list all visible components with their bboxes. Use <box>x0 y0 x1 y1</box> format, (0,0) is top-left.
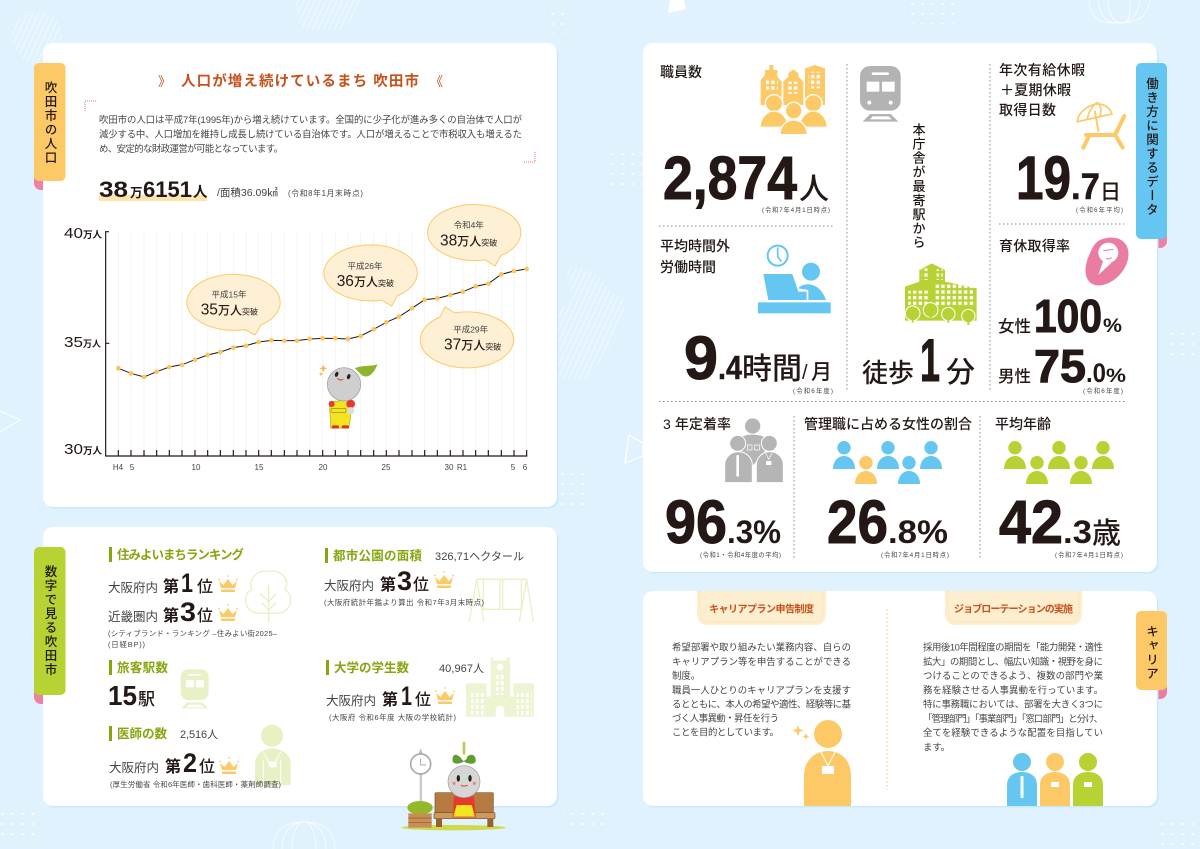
stat: 管理職に占める女性の割合: .8% <box>888 514 948 550</box>
panel: numbers <box>34 527 558 808</box>
block: ジョブローテーションの実施: 採用後10年間程度の期間を「能力開発・適性 <box>923 642 1103 652</box>
block: 大学の学生数: 第 <box>382 690 398 709</box>
mascot: standing <box>319 364 377 428</box>
icon: people blue and orange <box>833 441 942 484</box>
y axis labels: 40 <box>64 226 83 242</box>
tab: 働き方に関するデータ <box>1136 63 1167 239</box>
callout: 平成15年: 平成15年 <box>212 290 247 300</box>
tab: 働き方に関するデータ: 働き方に関するデータ <box>1144 77 1158 217</box>
icon: people green <box>1004 441 1114 484</box>
block: 都市公園の面積: 326,71ヘクタール <box>435 550 524 563</box>
x axis labels: 15 <box>255 463 264 472</box>
x axis labels: 10 <box>192 463 201 472</box>
icon: crown <box>218 575 238 592</box>
stat: 育休取得率: % <box>1106 366 1126 387</box>
block: 都市公園の面積: 都市公園の面積 <box>333 548 422 563</box>
y axis labels: 万人 <box>83 446 103 457</box>
callout: 平成26年 <box>324 245 417 306</box>
stat: 育休取得率: % <box>1103 316 1122 337</box>
stat: 育休取得率: 育休取得率 <box>999 238 1070 254</box>
stat: 3年定着率 <box>663 416 783 559</box>
icon: tree <box>245 571 291 623</box>
tab: キャリア: キャリア <box>1144 625 1158 681</box>
tab: 数字で見る吹田市 <box>34 547 66 695</box>
stat: 管理職に占める女性の割合 <box>804 416 972 559</box>
stat: 年次有給休暇: .7 <box>1071 166 1100 207</box>
x axis labels: 20 <box>319 463 328 472</box>
plot <box>106 232 529 456</box>
stat: 平均時間外労働時間: 労働時間 <box>660 259 716 275</box>
block: 都市公園の面積: 3 <box>397 566 412 596</box>
stat: 平均時間外労働時間: / <box>802 362 808 384</box>
stat: 育休取得率: 男性 <box>998 367 1031 386</box>
block: 住みよいまちランキング: 3 <box>180 597 196 627</box>
block: 大学の学生数: 大阪府内 <box>326 694 376 708</box>
x axis labels <box>113 463 528 472</box>
stat: 3年定着率: .3% <box>727 514 781 550</box>
population figure: /面積36.09㎢ <box>217 186 278 199</box>
block: キャリアプラン申告制度: ことを目的としています。 <box>672 726 779 738</box>
stat: 育休取得率 <box>998 238 1129 395</box>
stat: 職員数: 人 <box>799 173 829 206</box>
callout: 平成29年 <box>420 307 514 368</box>
block: キャリアプラン申告制度: づく人事異動・昇任を行う <box>672 712 779 724</box>
block: 都市公園の面積 <box>324 548 533 622</box>
icon: beach chair <box>1077 103 1124 148</box>
block: 大学の学生数: 位 <box>415 691 431 709</box>
callout: 令和4年: 38万人突破 <box>440 232 497 249</box>
intro text: 減少する中、人口増加を維持し成長し続けている自治体です。人口が増えることで市税収入も増えるた <box>99 128 522 140</box>
block: 住みよいまちランキング: (シティブランド・ランキング –住みよい街2025– <box>108 629 278 638</box>
block: ジョブローテーションの実施: 務を経験させる人事異動を行っています。 <box>923 684 1103 696</box>
stat: 徒歩1分: 徒歩 <box>862 358 914 388</box>
block: 大学の学生数: 大学の学生数 <box>334 660 409 675</box>
block: 医師の数: 医師の数 <box>117 726 167 741</box>
stat: 平均時間外労働時間: (令和6年度) <box>793 386 833 395</box>
callout: 平成29年: 平成29年 <box>453 325 489 335</box>
panel: career <box>643 591 1167 808</box>
stat: 職員数 <box>660 64 830 214</box>
block: ジョブローテーションの実施: 特に事務職においては、部署を大きく3つに <box>923 698 1103 710</box>
block: 医師の数: 大阪府内 <box>109 761 159 775</box>
stat: 育休取得率: 女性 <box>998 317 1031 336</box>
tab: 吹田市の人口: 吹田市の人口 <box>42 80 57 165</box>
icon: town and people <box>760 65 827 135</box>
stat: 平均年齢: 平均年齢 <box>995 416 1051 432</box>
block: キャリアプラン申告制度: 希望部署や取り組みたい業務内容、自らの <box>672 642 851 652</box>
icon: crown <box>219 757 239 774</box>
population figure: 万 <box>130 186 143 200</box>
block: 住みよいまちランキング: 第 <box>163 606 179 625</box>
block: 大学の学生数: 1 <box>401 681 412 711</box>
block: 大学の学生数 <box>326 657 534 722</box>
stat: 管理職に占める女性の割合: 管理職に占める女性の割合 <box>804 416 972 432</box>
block: 旅客駅数: 15 <box>108 680 137 711</box>
stat: 3年定着率: (令和1・令和4年度の平均) <box>700 550 781 559</box>
block: ジョブローテーションの実施: 拡大」の期間とし、幅広い知識・視野を身に <box>923 656 1103 667</box>
block: ジョブローテーションの実施: ジョブローテーションの実施 <box>954 602 1073 616</box>
x axis labels: H4 <box>113 463 124 472</box>
icon: gray train <box>860 66 901 122</box>
block: 医師の数 <box>109 725 291 789</box>
x axis labels: 6 <box>523 463 528 472</box>
block: 住みよいまちランキング: 大阪府内 <box>108 581 158 595</box>
icon: gray staff <box>725 418 783 483</box>
block: 大学の学生数: 40,967人 <box>439 663 484 675</box>
heading: population: 》 <box>158 74 171 89</box>
block: キャリアプラン申告制度: キャリアプラン等を申告することができる <box>672 656 851 667</box>
population figure: 38 <box>99 177 128 202</box>
callout: 平成15年: 35万人突破 <box>201 302 258 319</box>
icon: train <box>181 669 209 708</box>
block: 住みよいまちランキング: (日経BP)) <box>108 640 145 649</box>
x axis labels: 5 <box>511 463 516 472</box>
block: 旅客駅数: 旅客駅数 <box>117 660 168 675</box>
stat: 平均時間外労働時間: 9 <box>684 324 718 392</box>
population figure <box>99 177 363 202</box>
population figure: 6151 <box>143 177 192 202</box>
block: 都市公園の面積: 第 <box>380 575 396 594</box>
stat: 平均年齢: 42 <box>999 488 1063 556</box>
stat: 育休取得率: 100 <box>1034 290 1102 342</box>
callout: 平成15年 <box>187 274 280 335</box>
icon: doctor <box>255 725 291 785</box>
block: 住みよいまちランキング: 第 <box>163 577 179 596</box>
y axis labels: 30 <box>64 442 83 458</box>
stat: 年次有給休暇: 19 <box>1016 144 1071 212</box>
stat: 3年定着率: 3 年定着率 <box>663 416 731 432</box>
x axis labels: 5 <box>130 463 135 472</box>
block: 都市公園の面積: 大阪府内 <box>324 579 374 593</box>
stat: 育休取得率: 75 <box>1034 340 1086 392</box>
icon: orange staff <box>792 720 851 806</box>
population figure: 人 <box>193 185 208 201</box>
stat: 3年定着率: 96 <box>665 488 727 556</box>
y axis labels <box>64 226 103 458</box>
block: 旅客駅数 <box>108 660 209 711</box>
block: キャリアプラン申告制度: 職員一人ひとりのキャリアプランを支援す <box>672 684 851 696</box>
stat: 平均年齢: (令和7年4月1日時点) <box>1055 550 1123 559</box>
stat: 徒歩1分: 本庁舎が最寄駅から <box>910 123 926 250</box>
line chart: population <box>64 226 529 472</box>
block: 都市公園の面積: 位 <box>413 576 429 594</box>
y axis labels: 万人 <box>83 339 101 349</box>
block: キャリアプラン申告制度: るとともに、本人の希望や適性、経験等に基 <box>672 698 852 710</box>
block: ジョブローテーションの実施: つけることのできるよう、複数の部門や業 <box>923 670 1104 681</box>
stat: 平均時間外労働時間 <box>660 238 833 395</box>
stat: 年次有給休暇: 日 <box>1100 181 1121 204</box>
panel: population <box>34 43 558 508</box>
stat: 平均時間外労働時間: 平均時間外 <box>660 238 730 254</box>
icon: swing <box>469 579 533 622</box>
population figure: (令和8年1月末時点) <box>288 188 363 198</box>
x axis labels: R1 <box>457 463 468 472</box>
block: 医師の数: 位 <box>199 758 215 776</box>
block: 旅客駅数: 駅 <box>138 690 155 709</box>
icon: crown <box>218 604 238 621</box>
mascot: bench and clock <box>401 742 506 830</box>
icon: baby <box>1085 238 1129 285</box>
block: 住みよいまちランキング: 住みよいまちランキング <box>117 547 244 562</box>
block: キャリアプラン申告制度: キャリアプラン申告制度 <box>709 602 814 616</box>
intro text: め、安定的な財政運営が可能となっています。 <box>99 143 283 154</box>
stat: 管理職に占める女性の割合: (令和7年4月1日時点) <box>881 550 949 559</box>
y axis labels: 35 <box>64 335 83 351</box>
block: 医師の数: 2 <box>183 748 197 778</box>
stat: 年次有給休暇 <box>999 62 1124 214</box>
icon: desk worker <box>758 246 831 313</box>
stat: 平均時間外労働時間: 時間 <box>742 353 802 386</box>
callout: 平成29年: 37万人突破 <box>444 336 501 353</box>
x axis labels: 30 <box>445 463 454 472</box>
stat: 徒歩1分: 1 <box>920 327 940 394</box>
y axis labels: 万人 <box>83 230 103 241</box>
stat: 平均年齢: 歳 <box>1092 517 1121 550</box>
intro text: 吹田市の人口は平成7年(1995年)から増え続けています。全国的に少子化が進み多くの自治体で人口が <box>99 114 523 125</box>
stat: 年次有給休暇: 年次有給休暇 <box>999 62 1085 78</box>
block: 住みよいまちランキング: 位 <box>197 607 213 625</box>
block: 大学の学生数: (大阪府 令和6年度 大阪の学校統計) <box>329 713 456 722</box>
block: 医師の数: 第 <box>165 757 181 776</box>
tab: キャリア <box>1136 611 1167 690</box>
stat: 平均時間外労働時間: .4 <box>718 349 743 386</box>
icon: crown <box>434 571 454 588</box>
callout: 平成26年: 36万人突破 <box>337 273 394 290</box>
stat: 年次有給休暇: (令和6年平均) <box>1076 205 1123 214</box>
stat: 年次有給休暇: 取得日数 <box>999 102 1056 118</box>
block: キャリアプラン申告制度: 制度。 <box>672 670 700 681</box>
stat: 管理職に占める女性の割合: 26 <box>827 488 888 556</box>
block: 住みよいまちランキング: 近畿圏内 <box>108 610 158 624</box>
icon: office building <box>905 263 977 325</box>
x axis labels: 25 <box>382 463 391 472</box>
block: 医師の数: 2,516人 <box>180 729 218 741</box>
stat: 職員数: (令和7年4月1日時点) <box>762 205 830 214</box>
block: ジョブローテーションの実施 <box>923 591 1104 806</box>
block: ジョブローテーションの実施: ます。 <box>923 742 950 752</box>
tab: 数字で見る吹田市: 数字で見る吹田市 <box>42 564 57 677</box>
stat: 平均時間外労働時間: 月 <box>811 361 832 384</box>
stat: 平均年齢 <box>995 416 1123 559</box>
stat: 徒歩1分: 分 <box>946 357 975 389</box>
heading: population: 《 <box>430 74 443 89</box>
intro text <box>85 101 535 162</box>
stat: 育休取得率: (令和6年度) <box>1083 386 1123 395</box>
callout: 令和4年: 令和4年 <box>454 220 484 230</box>
callout: 平成26年: 平成26年 <box>348 261 383 271</box>
icon: university <box>466 657 534 717</box>
stat: 育休取得率: .0 <box>1086 358 1106 388</box>
panel: work data <box>643 43 1167 574</box>
icon: three staff <box>1007 753 1103 806</box>
stat: 職員数: 2,874 <box>663 144 797 212</box>
heading: population: 人口が増え続けているまち 吹田市 <box>181 72 419 90</box>
block: 都市公園の面積: (大阪府統計年鑑より算出 令和7年3月末時点) <box>324 598 484 607</box>
block: 医師の数: (厚生労働省 令和6年医師・歯科医師・薬剤師調査) <box>110 780 281 789</box>
stat: 年次有給休暇: ＋夏期休暇 <box>1000 82 1071 98</box>
block: キャリアプラン申告制度 <box>672 591 852 806</box>
block: 住みよいまちランキング: 位 <box>197 578 213 596</box>
block: ジョブローテーションの実施: 「管理部門」「事業部門」「窓口部門」と分け、 <box>923 713 1103 724</box>
tab: 吹田市の人口 <box>34 63 66 181</box>
stat: 職員数: 職員数 <box>660 64 702 80</box>
block: 住みよいまちランキング: 1 <box>181 568 193 598</box>
block: ジョブローテーションの実施: 全てを経験できるような配置を目指してい <box>923 727 1103 738</box>
stat: 徒歩1分 <box>860 66 977 394</box>
stat: 平均年齢: .3 <box>1063 514 1092 550</box>
icon: crown <box>435 687 455 704</box>
block: 住みよいまちランキング <box>108 547 291 649</box>
callout: 令和4年 <box>428 205 521 266</box>
